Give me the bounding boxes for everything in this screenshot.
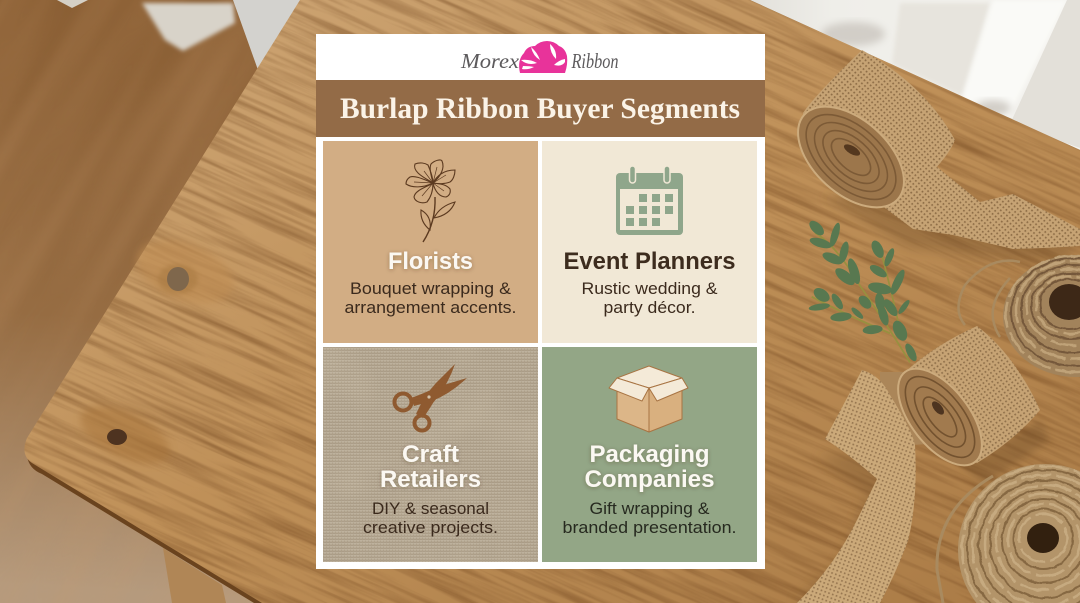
panel: packaging companies: Gift wrapping &	[590, 500, 710, 518]
panel: craft retailers: DIY & seasonal	[372, 500, 489, 518]
panel: packaging companies: Packaging	[590, 441, 710, 468]
twine spool bottom right	[930, 460, 1080, 603]
panel: florists: arrangement accents.	[344, 299, 516, 317]
twine loops right	[958, 261, 1020, 337]
icon: scissors	[394, 364, 467, 430]
panel: packaging companies: Companies	[584, 466, 714, 493]
panel: craft retailers: creative projects.	[363, 519, 498, 537]
twine spool right	[995, 245, 1080, 385]
burlap roll top right	[779, 50, 1080, 263]
icon: box	[609, 366, 688, 432]
table leg	[163, 548, 226, 603]
panel: florists: Bouquet wrapping &	[350, 280, 511, 298]
infographic card	[316, 34, 765, 569]
logo	[460, 41, 618, 73]
logo: Ribbon	[571, 49, 618, 73]
icon: pink fan	[519, 41, 567, 73]
ribbon loop	[880, 372, 945, 445]
panel: florists	[323, 141, 538, 343]
burlap ribbon centre right	[793, 326, 1050, 603]
panel: event planners: party décor.	[604, 299, 696, 317]
wood knot lower	[72, 395, 178, 475]
panel: craft retailers: Retailers	[380, 466, 481, 493]
roll body	[905, 326, 1040, 463]
logo: Morex	[460, 49, 520, 73]
panel: packaging companies: branded presentation.	[562, 519, 736, 537]
panel: craft retailers: Craft	[402, 441, 459, 468]
panel: craft retailers	[323, 347, 538, 562]
ribbon tail	[877, 167, 1080, 249]
icon: calendar	[616, 166, 683, 235]
panel: florists: Florists	[388, 248, 473, 275]
icon: flower	[406, 160, 455, 242]
panel: packaging companies	[542, 347, 757, 562]
panel: event planners: Rustic wedding &	[582, 280, 718, 298]
panel: event planners	[542, 141, 757, 343]
title banner: Burlap Ribbon Buyer Segments	[340, 92, 740, 125]
title banner	[316, 80, 765, 137]
green sprig	[807, 218, 919, 363]
wood knot upper	[128, 229, 242, 315]
panel: event planners: Event Planners	[564, 248, 736, 275]
